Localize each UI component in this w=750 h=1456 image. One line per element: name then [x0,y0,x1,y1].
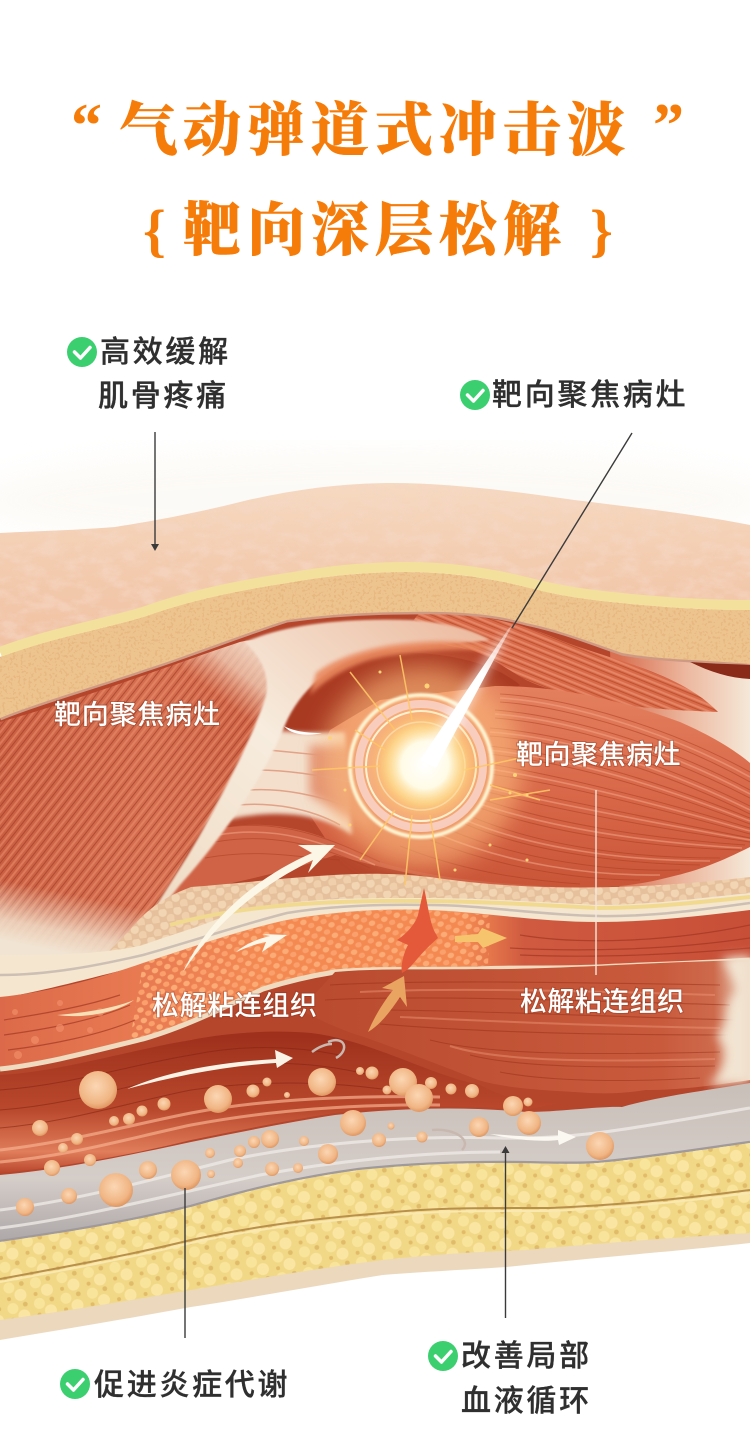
orange cell tissue layer [0,909,750,1067]
tendon arch [140,620,490,932]
rays [312,655,550,885]
left muscle bundle [0,640,268,955]
title line 2: { [143,198,166,263]
dark middle muscle [0,1032,560,1173]
callout: 改善局部 血液循环: 血液循环 [461,1385,592,1418]
white labels on muscle: 松解粘连组织 [520,987,684,1017]
pointer: inflammation line [184,1188,186,1338]
fat sponge layer [0,572,750,718]
upper right muscle band [390,612,718,712]
grey fascia layer [0,1083,750,1242]
title [71,92,684,263]
central muscle belly [165,686,750,898]
white labels on muscle: 靶向聚焦病灶 [54,700,221,730]
icon: green check [67,337,97,367]
bead fat layer [100,874,750,960]
sparks [328,670,528,872]
callout: 改善局部 血液循环 [428,1340,592,1418]
arrow: orange up [368,976,407,1032]
title line 1: 气动弹道式冲击波 [119,98,631,163]
title line 2: 靶向深层松解 [183,198,567,263]
pointer: skin arrow [151,432,159,551]
inflammatory particles [16,1066,614,1216]
icon: green check [428,1341,458,1371]
arrow: white sliver in muscle [284,726,322,735]
middle cream tendon [218,728,372,835]
pointer: circulation arrow [502,1146,510,1318]
callout: 高效缓解 肌骨疼痛 [67,336,231,413]
muscle base [0,605,750,1180]
shockwave focal ring [312,655,550,885]
title line 1: ” [653,92,684,160]
icon: green check [460,380,490,410]
arrow: large cream curve [183,845,335,972]
rings [350,695,492,837]
pink fascia edge under sponge [0,612,750,718]
callout: 改善局部 血液循环: 改善局部 [461,1340,592,1373]
callout: 靶向聚焦病灶: 靶向聚焦病灶 [492,379,688,412]
beam and pointer: 靶向聚焦病灶 [420,433,632,768]
skin surface [0,480,750,655]
cream base band [0,1231,750,1340]
lower right muscle [300,960,750,1093]
pointer: white vertical line [595,790,597,975]
white labels on muscle: 松解粘连组织 [152,991,318,1021]
arrow: cream sliver [57,1000,134,1016]
callout: 促进炎症代谢: 促进炎症代谢 [94,1369,290,1402]
background: soft cream glow behind skin [0,450,750,550]
arrow: gold right [455,928,507,948]
cream band under cell layer [0,960,750,1069]
dark inner cavity muscle [270,652,520,745]
title line 1: “ [71,92,102,160]
callout: 高效缓解 肌骨疼痛: 高效缓解 [100,336,231,369]
swirl marks [312,1040,465,1150]
cream connective band [0,893,750,998]
yellow fat layers [0,1140,750,1330]
dark sliver under sponge at far right [690,662,750,679]
right cream end of lower muscle [708,955,750,1086]
arrow: white in grey layer [490,1130,576,1145]
flow arrows [57,726,576,1150]
right cream tendon [610,650,750,900]
callout: 高效缓解 肌骨疼痛: 肌骨疼痛 [98,380,229,413]
white labels on muscle [54,700,684,1021]
arrow: red lightning [397,888,438,973]
arrow: white mid muscle [127,1050,293,1089]
icon: green check [60,1369,90,1399]
arrow: small white in cells [236,934,287,952]
yellow dermis band [0,567,750,652]
white labels on muscle: 靶向聚焦病灶 [516,740,681,770]
core [369,709,481,821]
title line 2: } [590,198,613,263]
anatomy cross-section illustration [0,480,750,1340]
